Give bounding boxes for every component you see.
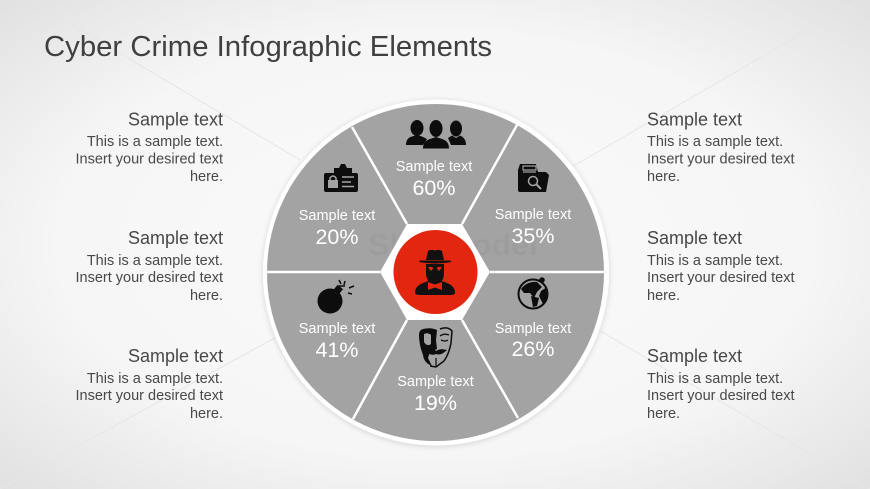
segment label: 35%: 35% xyxy=(511,224,555,248)
segment label: 60% xyxy=(396,159,472,200)
right text block 2: Sample text xyxy=(647,228,742,248)
left text block 2: Sample text xyxy=(128,228,223,248)
icon: group of people xyxy=(406,120,466,148)
left text block 2: Insert your desired text xyxy=(76,270,223,286)
center red circle with spy icon xyxy=(394,230,478,314)
segment label: 41% xyxy=(299,321,375,362)
right text block 2: here. xyxy=(647,288,680,304)
icon: bomb xyxy=(318,280,354,314)
segment label: 19%: 19% xyxy=(414,391,457,415)
left text block 2: here. xyxy=(190,288,223,304)
right text block 1 xyxy=(647,110,794,185)
segment label: 35% xyxy=(495,207,571,248)
segment label: 41%: 41% xyxy=(315,338,359,362)
left text block 1: here. xyxy=(190,169,223,185)
right text block 2 xyxy=(647,228,794,304)
left text block 1: This is a sample text. xyxy=(87,134,223,150)
segment label: 60%: Sample text xyxy=(396,159,472,175)
left text block 3 xyxy=(76,346,223,422)
segment label: 20%: 20% xyxy=(315,225,359,249)
right text block 2: Insert your desired text xyxy=(647,270,794,286)
segment label: 26% xyxy=(495,321,571,361)
right text block 3: Sample text xyxy=(647,346,742,366)
left text block 1: Sample text xyxy=(128,110,223,130)
left text block 1: Insert your desired text xyxy=(76,152,223,168)
segment label: 26%: Sample text xyxy=(495,321,571,337)
right text block 3: here. xyxy=(647,406,680,422)
right text block 3: This is a sample text. xyxy=(647,371,783,387)
title: Cyber Crime Infographic Elements xyxy=(44,31,492,63)
segment label: 60%: 60% xyxy=(412,176,456,200)
icon: id badge xyxy=(324,164,358,192)
icon: anonymous mask xyxy=(419,328,452,367)
icon: globe xyxy=(518,277,548,308)
left text block 1 xyxy=(76,110,223,185)
watermark: SlideModel xyxy=(368,229,538,262)
left text block 2: This is a sample text. xyxy=(87,253,223,269)
left text block 3: here. xyxy=(190,406,223,422)
right text block 1: Sample text xyxy=(647,110,742,130)
left text block 3: Insert your desired text xyxy=(76,388,223,404)
right text block 1: This is a sample text. xyxy=(647,134,783,150)
right text block 1: here. xyxy=(647,169,680,185)
wheel xyxy=(263,100,609,446)
left text block 3: This is a sample text. xyxy=(87,371,223,387)
segment label: 19% xyxy=(397,374,474,415)
right text block 2: This is a sample text. xyxy=(647,253,783,269)
left text block 2 xyxy=(76,228,223,304)
right text block 3: Insert your desired text xyxy=(647,388,794,404)
right text block 1: Insert your desired text xyxy=(647,152,794,168)
icon: folder with magnifier xyxy=(518,164,549,192)
segment label: 26%: 26% xyxy=(511,337,555,361)
segment label: 20%: Sample text xyxy=(299,208,375,224)
right text block 3 xyxy=(647,346,794,422)
segment label: 19%: Sample text xyxy=(397,374,474,390)
segment label: 41%: Sample text xyxy=(299,321,375,337)
segment label: 20% xyxy=(299,208,375,249)
segment label: 35%: Sample text xyxy=(495,207,571,223)
left text block 3: Sample text xyxy=(128,346,223,366)
